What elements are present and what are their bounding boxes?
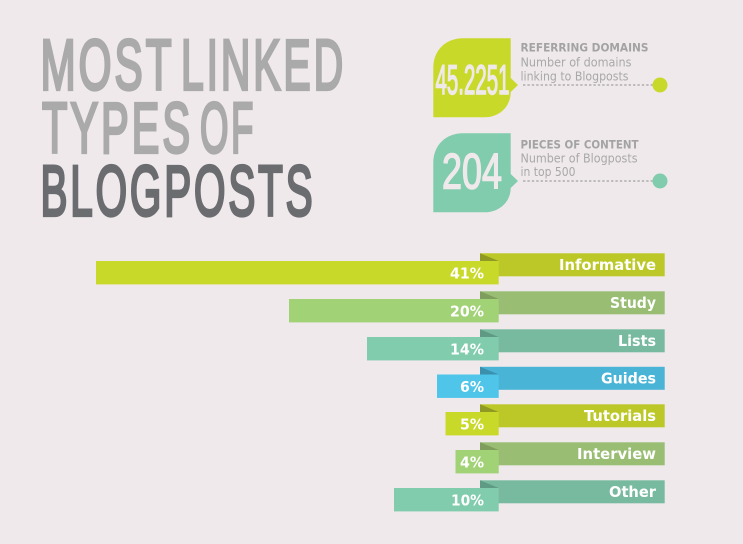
badge: 45.2251 — [433, 38, 518, 117]
dashed leader with dot — [523, 174, 668, 188]
dashed leader with dot — [523, 78, 668, 92]
bar: Other 10%: Other — [609, 483, 657, 501]
bar: Informative 41%: 41% — [450, 264, 484, 282]
bar: Other 10%: 10% — [451, 492, 484, 510]
title: TYPES — [42, 89, 193, 168]
bar: Tutorials 5%: Tutorials — [584, 407, 656, 425]
heading: pieces of content: PIECES OF CONTENT — [520, 137, 639, 151]
bar: Lists 14%: Lists — [618, 332, 656, 350]
description: domains: Number of domains — [520, 56, 632, 70]
bar: Interview 4%: 4% — [460, 454, 484, 472]
bar: Tutorials 5% — [446, 404, 665, 435]
description: linking: linking to Blogposts — [520, 70, 628, 84]
description: top 500: in top 500 — [520, 165, 576, 179]
bar: Informative 41%: Informative — [559, 256, 656, 274]
bar: Tutorials 5%: 5% — [460, 416, 484, 434]
callout: referring domains: 45.2251 — [436, 56, 510, 103]
title: OF — [200, 89, 256, 168]
bar: Other 10% — [394, 480, 665, 511]
title — [40, 26, 346, 231]
title: BLOGPOSTS — [40, 152, 316, 231]
bar: Lists 14% — [367, 329, 665, 360]
bar: Interview 4% — [456, 442, 665, 473]
description: blogposts: Number of Blogposts — [520, 151, 638, 165]
callout: referring domains — [433, 38, 668, 117]
bar: Informative 41% — [96, 253, 665, 284]
bar: Guides 6%: 6% — [460, 378, 484, 396]
bar: Study 20% — [289, 291, 665, 322]
number: 204: 204 — [442, 144, 502, 200]
bar: Study 20%: Study — [610, 294, 656, 312]
badge: 204 — [433, 133, 518, 212]
bar: Interview 4%: Interview — [577, 445, 656, 463]
title: MOST — [40, 26, 174, 105]
bar: Lists 14%: 14% — [450, 340, 484, 358]
bar: Guides 6%: Guides — [601, 370, 656, 388]
title: LINKED — [181, 26, 346, 105]
bar chart — [96, 253, 665, 511]
heading: referring domains: REFERRING DOMAINS — [520, 41, 648, 55]
bar: Guides 6% — [437, 367, 665, 398]
bar: Study 20%: 20% — [450, 302, 484, 320]
callout: pieces of content — [433, 133, 668, 212]
